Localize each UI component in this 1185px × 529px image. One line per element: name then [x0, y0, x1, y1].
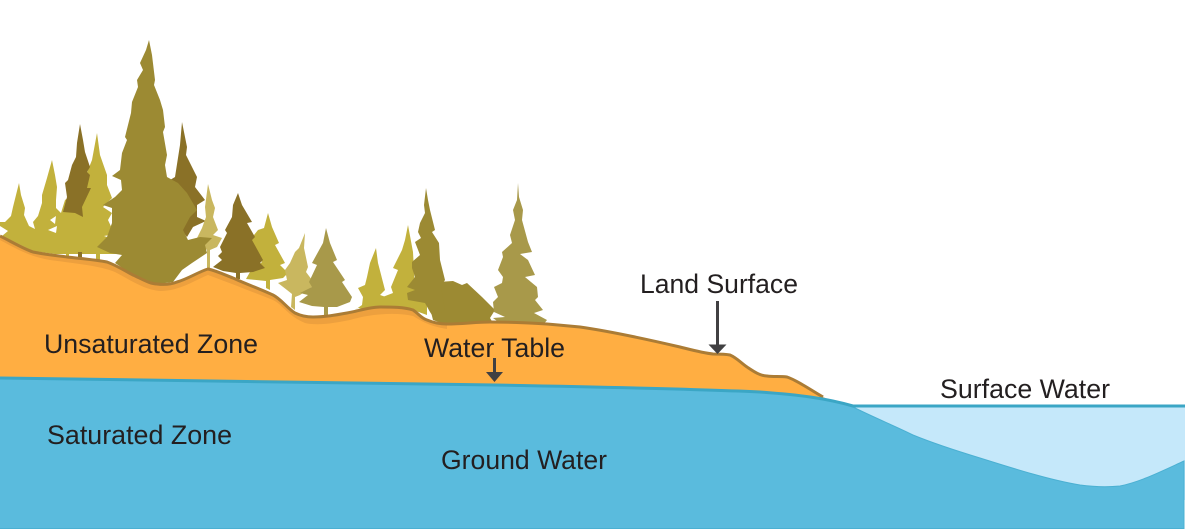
soil shadow: [0, 236, 447, 329]
label: water table: Water Table: [424, 333, 565, 363]
tree: olive tall: [407, 188, 445, 318]
white gaps between left trees: [48, 216, 115, 238]
trees: forest: [0, 40, 547, 325]
water table line: [0, 378, 1185, 406]
soil: unsaturated zone: [0, 236, 830, 400]
tree: pale behind: [278, 233, 312, 310]
tree: light behind olive: [380, 225, 427, 315]
arrow: land surface: [708, 301, 726, 354]
tree: dark brown center: [213, 193, 265, 279]
label: land surface: Land Surface: [640, 269, 798, 299]
label: saturated zone: Saturated Zone: [47, 420, 232, 450]
tree: dark brown behind large: [170, 122, 206, 237]
tree: pale small: [196, 184, 222, 268]
arrow: water table: [486, 358, 503, 382]
surface water: lake: [850, 406, 1185, 500]
tree: left light group: [0, 133, 125, 261]
tree: dark brown back left: [63, 124, 91, 217]
ground water: saturated zone: [0, 378, 1184, 528]
tree: olive cone: [299, 228, 352, 315]
shrub: rounded mound: [428, 281, 495, 325]
tree: large central: [97, 40, 212, 284]
tree: small light: [352, 248, 386, 312]
label: surface water: Surface Water: [940, 374, 1110, 404]
label: unsaturated zone: Unsaturated Zone: [44, 329, 258, 359]
land surface line: [0, 236, 823, 397]
tree: light right of center: [246, 213, 288, 290]
label: ground water: Ground Water: [441, 445, 607, 475]
tree: tall right: [493, 183, 547, 325]
